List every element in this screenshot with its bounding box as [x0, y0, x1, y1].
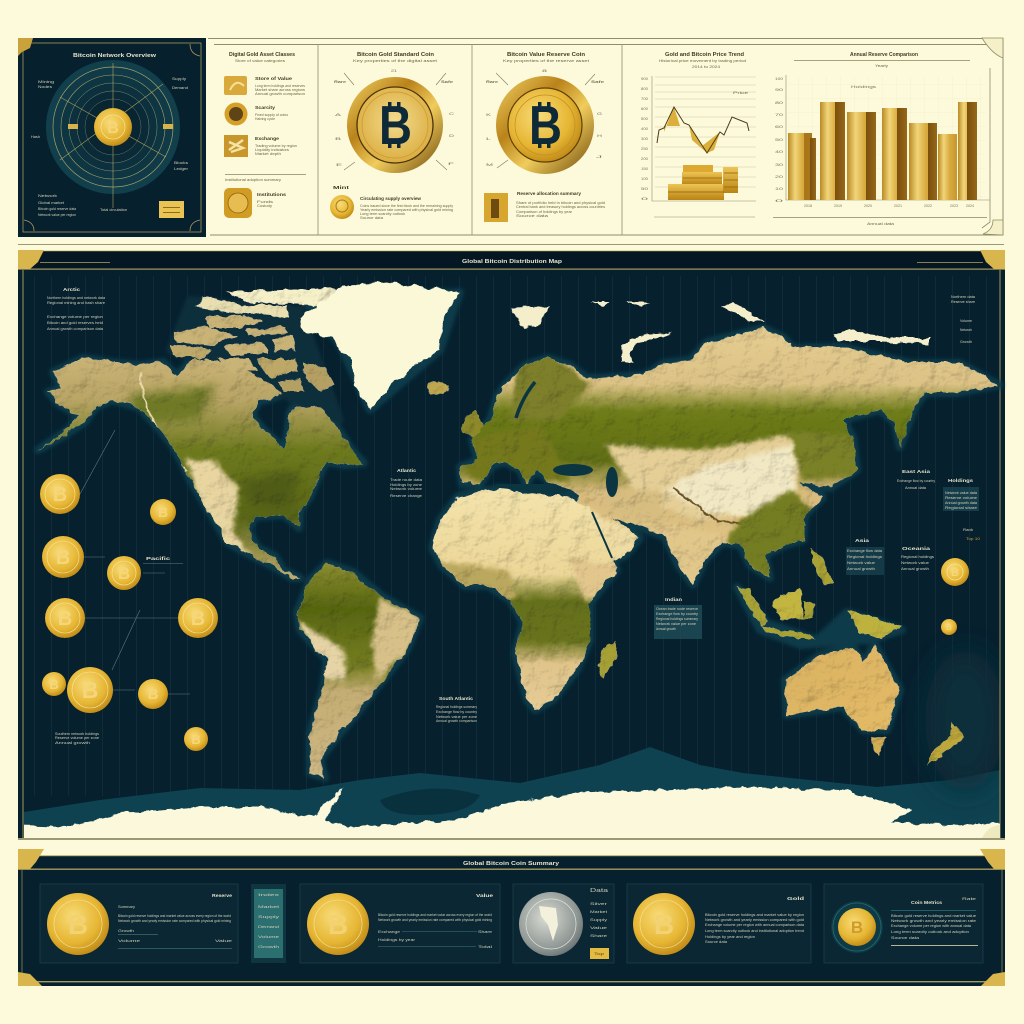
token item 4: Funds	[257, 200, 273, 204]
map annotation: north atlantic: Reserve change	[390, 494, 422, 498]
coin two heading: Bitcoin Value Reserve Coin	[507, 52, 585, 58]
map annotation: top left: Exchange volume per region	[47, 315, 103, 319]
coin two callouts: M	[486, 163, 493, 167]
map annotation: south asia group: Annual growth	[901, 567, 929, 571]
line chart grid and axis: 50	[641, 187, 648, 191]
bar chart axis: 0	[775, 199, 783, 203]
map annotation: indian ocean: Exchange flow by country	[656, 612, 698, 616]
map annotation: asia group: Annual growth data	[945, 501, 977, 505]
token item 3	[224, 135, 297, 157]
bottom card 1: B	[68, 909, 88, 940]
radar labels: Ledger	[174, 167, 189, 171]
bottom card 4 silver: Market	[590, 910, 607, 914]
line chart grid and axis: 800	[641, 87, 648, 91]
bottom card 5: Exchange volume per region with annual comparison data	[705, 923, 804, 927]
token list heading: Digital Gold Asset Classes	[229, 52, 295, 58]
map annotation: top right: Growth	[960, 340, 972, 344]
coin one caption: Source data	[360, 216, 383, 220]
bottom card 6: Coin Metrics	[911, 900, 943, 905]
map annotation: top left: Bitcoin and gold reserves held	[47, 321, 103, 325]
coin one caption: Yearly emission rate compared with physical gold mining	[360, 208, 453, 212]
bar chart axis: 20	[775, 175, 783, 179]
coin two graphic	[496, 76, 594, 174]
bottom card 6: Long term scarcity outlook and adoption	[891, 930, 969, 934]
token item 3: Liquidity indicators	[255, 148, 289, 152]
coin: map right group: B	[946, 623, 952, 632]
bar chart year labels: 2019	[834, 204, 842, 208]
map annotation: top left: Annual growth comparison data	[47, 327, 103, 331]
map annotation: south asia group: Exchange flow data	[847, 549, 882, 553]
line chart grid and axis: 250	[641, 147, 648, 151]
map annotation: top left: Arctic	[63, 287, 81, 292]
bar chart axis: 50	[775, 138, 783, 142]
coin two callouts: G	[597, 112, 602, 116]
line chart grid and axis: Price	[733, 91, 748, 95]
land: north america	[38, 358, 364, 578]
bottom strip heading: Global Bitcoin Coin Summary	[463, 861, 559, 867]
token item 4: Custody	[257, 204, 272, 208]
coin one callouts: F	[448, 162, 456, 166]
map annotation: top right: Volume	[960, 319, 972, 323]
panel: bitcoin coin one	[330, 52, 456, 220]
southern ocean band	[24, 747, 1000, 838]
map annotation: north atlantic: Network volume	[390, 487, 422, 491]
bar chart heading: Annual Reserve Comparison	[850, 52, 918, 58]
coin: map left group: B	[53, 484, 67, 506]
bar chart axis: 10	[775, 187, 783, 191]
coin one caption: Mint	[333, 185, 350, 190]
coin two caption: Reserve allocation summary	[517, 191, 582, 196]
coin one callouts: B	[335, 137, 342, 141]
bottom card 2 teal: Market	[258, 905, 279, 909]
bottom card 4 silver: Share	[590, 934, 607, 938]
bottom card 2 teal	[251, 884, 286, 963]
bar chart year labels: 2023	[950, 204, 958, 208]
radar labels: Network	[38, 194, 58, 198]
coin: map left group: B	[118, 564, 130, 583]
map annotation: south pacific: Annual growth	[55, 741, 90, 745]
divider rule	[18, 244, 1004, 245]
panel: bitcoin coin two	[484, 52, 605, 222]
map annotation: indian ocean: Annual growth	[656, 627, 676, 631]
coin two graphic: B	[529, 94, 562, 156]
token item 4: Institutional adoption summary	[225, 178, 281, 182]
bottom card 3: B	[328, 909, 348, 940]
land: canadian arctic islands	[170, 288, 340, 392]
bottom strip corners	[18, 849, 1005, 986]
line chart grid and axis: 200	[641, 157, 648, 161]
ocean shallows right	[925, 650, 1005, 790]
coin: map left group: B	[58, 608, 72, 630]
map annotation: top right: Northern data	[951, 295, 975, 299]
bottom card 1: Bitcoin gold reserve holdings and market value across every region of the world	[118, 914, 231, 918]
coin one callouts: E	[336, 163, 343, 167]
bottom card 3: Bitcoin gold reserve holdings and market value across every region of the world	[378, 913, 492, 917]
line chart grid and axis: 600	[641, 107, 648, 111]
line chart grid and axis: 300	[641, 137, 648, 141]
radar labels: Nodes	[38, 85, 53, 89]
line chart grid and axis: 150	[641, 167, 648, 171]
coin: map left group: B	[49, 677, 59, 692]
map annotation: south asia group: Regional holdings	[847, 555, 883, 559]
panel: bottom strip	[18, 849, 1005, 986]
bottom card 6: Network growth and yearly emission rate	[891, 919, 976, 923]
bottom card 5: Gold	[787, 896, 804, 901]
map annotation: asia group: Exchange flow by country	[897, 479, 935, 483]
coin: map left group	[40, 430, 218, 751]
map annotation: asia group: Annual data	[905, 486, 926, 490]
continental shelf halo	[38, 292, 999, 778]
map annotation: south asia group: Network value	[901, 561, 929, 565]
coin two callouts: K	[486, 113, 492, 117]
map annotation: south pacific	[55, 732, 99, 745]
token item 1: Market share across regions	[255, 88, 305, 92]
land: uk	[462, 410, 487, 437]
bottom card 5: B	[654, 909, 674, 940]
bar chart axis	[775, 68, 990, 228]
radar legend card	[159, 201, 184, 218]
bottom card 2 teal: Growth	[258, 945, 279, 949]
token item 3: Market depth	[255, 152, 281, 156]
token item 3: Exchange	[255, 136, 280, 141]
bar chart axis: Holdings	[851, 85, 876, 89]
panel: bitcoin coin two: Key properties of the reserve asset	[503, 59, 589, 63]
coin one caption: Circulating supply overview	[360, 196, 422, 201]
bottom card 3: Share	[478, 930, 492, 934]
radar labels: Network value per region	[38, 213, 76, 217]
bottom card 4 silver: Supply	[590, 918, 608, 922]
map annotation: asia group: Regional share	[945, 506, 977, 510]
map annotation: asia group	[897, 469, 979, 511]
bottom card 1: Value	[215, 939, 232, 943]
map annotation: north atlantic: Holdings by zone	[390, 483, 422, 487]
coin two callouts: H	[597, 134, 603, 138]
coin two callouts: L	[486, 137, 491, 141]
land: greenland	[300, 282, 460, 410]
coin two callouts: Safe	[591, 80, 604, 84]
bottom card 5: Long term scarcity outlook and institutional adoption trend	[705, 929, 804, 933]
line chart grid and axis: 400	[641, 127, 648, 131]
bar chart axis: 90	[775, 88, 783, 92]
map annotation: top right	[951, 295, 975, 344]
coin two callouts: Rare	[486, 80, 498, 84]
bottom card 1: Volume	[118, 939, 140, 943]
bottom card 3: Holdings by year	[378, 938, 416, 942]
panel: token list: Store of value categories	[235, 59, 285, 63]
map annotation: asia group: Network value data	[945, 491, 977, 495]
map annotation: top left	[47, 287, 105, 331]
land: south east asia islands	[737, 548, 902, 640]
bottom card 5: Network growth and yearly emission compared with gold	[705, 918, 804, 922]
panel: token list	[224, 52, 306, 218]
coin one callouts: Safe	[441, 80, 453, 84]
bottom card 1: Summary	[118, 905, 136, 909]
radar centre coin	[94, 108, 132, 146]
bar chart year labels: Annual data	[867, 222, 894, 226]
map corner ornaments	[18, 250, 1005, 838]
coin: map left group: B	[158, 504, 168, 520]
ocean grid	[30, 276, 996, 796]
panel: top cream frame	[208, 38, 1003, 235]
bottom card 6: Bitcoin gold reserve holdings and market value	[891, 914, 976, 918]
coin: map left group: B	[148, 686, 159, 703]
land: tasmania	[870, 736, 888, 755]
map ocean	[18, 250, 1005, 840]
continents	[38, 288, 999, 778]
bottom card 4 silver: Value	[590, 926, 607, 930]
panel: bar chart: Yearly	[875, 64, 888, 68]
bottom card 6: Rate	[962, 897, 976, 901]
token item 2: Scarcity	[255, 105, 276, 110]
map annotation: asia group: Holdings	[948, 478, 974, 483]
coin two caption: Share of portfolio held in bitcoin and physical gold	[516, 201, 605, 205]
bar chart year labels: 2024	[966, 204, 974, 208]
map annotation: north atlantic	[390, 468, 422, 498]
coin one graphic: B	[379, 94, 412, 156]
map annotation: indian ocean: Regional holdings summary	[656, 617, 698, 621]
coin one callouts: A	[335, 113, 342, 117]
bottom card 3: Network growth and yearly emission rate compared with physical gold mining	[378, 918, 492, 922]
map annotation: south asia group: Asia	[855, 538, 870, 543]
radar labels: Supply	[172, 77, 187, 81]
radar labels: Blocks	[174, 161, 189, 165]
bottom card 2 teal: Index	[258, 893, 280, 897]
bar chart axis: 100	[775, 77, 783, 81]
bar chart axis: 60	[775, 125, 783, 129]
price line	[657, 107, 749, 153]
map annotation: north atlantic: Atlantic	[397, 468, 417, 473]
bars	[788, 102, 977, 200]
map annotation: south asia group: Regional holdings	[901, 555, 935, 559]
bottom card 3: Exchange	[378, 930, 400, 934]
bottom card 5: Holdings by year and region	[705, 935, 755, 939]
coin one callouts: C	[449, 112, 455, 116]
coin one heading: Bitcoin Gold Standard Coin	[357, 52, 434, 58]
bottom card 3: Value	[476, 893, 494, 898]
map annotation: south asia group: Annual growth	[847, 567, 875, 571]
gold ingots	[668, 165, 738, 200]
map annotation: south asia group: Oceania	[902, 546, 931, 551]
map annotation: south atlantic: Annual growth comparison	[436, 719, 477, 723]
coin one callouts	[334, 69, 456, 170]
map annotation: south atlantic: Regional holdings summary	[436, 705, 477, 709]
coin two caption	[484, 191, 605, 222]
bar chart year labels: 2020	[864, 204, 872, 208]
map annotation: top left: Regional mining and hash share	[47, 301, 105, 305]
token item 4	[224, 174, 306, 218]
bar chart axis: 30	[775, 163, 783, 167]
land: iceland	[426, 382, 448, 394]
bar chart year labels: 2018	[804, 204, 812, 208]
bottom card 1	[40, 884, 238, 963]
land: antarctica	[10, 787, 1010, 860]
bottom card 4 silver: Silver	[590, 902, 609, 906]
map annotation: south asia group	[846, 528, 980, 575]
line chart grid and axis: 900	[641, 77, 648, 81]
bottom card 5: Bitcoin gold reserve holdings and market value by region	[705, 913, 804, 917]
bottom card 3: Total	[478, 945, 493, 949]
line chart grid and axis	[641, 76, 756, 217]
coin: map left group: B	[82, 677, 98, 703]
coin two callouts: J	[596, 155, 603, 159]
panel: line chart: 2014 to 2024	[692, 65, 720, 69]
bar chart axis: 70	[775, 113, 783, 117]
radar labels	[31, 77, 189, 217]
land: madagascar	[598, 640, 618, 680]
land: polar ice	[10, 282, 1010, 860]
coin: map left group: B	[191, 608, 205, 630]
coin one graphic	[347, 77, 443, 173]
bottom card 6: B	[851, 918, 863, 937]
bottom card 1: Network growth and yearly emission rate compared with physical gold mining	[118, 919, 231, 923]
bottom card 2 teal: Supply	[258, 915, 280, 919]
radar chart	[46, 60, 180, 208]
bottom card 6: Source data	[891, 936, 919, 940]
coin one callouts: 21	[391, 69, 397, 73]
map annotation: south atlantic: Network value per zone	[436, 715, 477, 719]
line chart heading: Gold and Bitcoin Price Trend	[665, 52, 744, 58]
panel: line chart	[641, 52, 756, 217]
coin: map left group: B	[56, 547, 70, 569]
map annotation: asia group: East Asia	[902, 469, 931, 474]
map annotation: north atlantic: Trade route data	[390, 478, 422, 482]
map bottom rule	[18, 838, 1005, 840]
radar labels: Bitcoin gold reserve data	[38, 207, 76, 211]
line chart grid and axis: 500	[641, 117, 648, 121]
land: africa	[432, 488, 620, 710]
panel: bitcoin coin one: Key properties of the digital asset	[353, 59, 437, 63]
bottom card 3	[300, 884, 500, 963]
radar labels: Mining	[38, 80, 54, 84]
token item 2	[224, 102, 288, 126]
map frame	[23, 270, 1000, 838]
bar chart year labels: 2022	[924, 204, 932, 208]
radar centre coin: B	[107, 120, 119, 137]
radar labels: Total circulation	[100, 208, 127, 212]
coin two caption: Source data	[516, 214, 548, 218]
bar chart year labels	[773, 204, 987, 226]
land: new zealand	[928, 722, 965, 765]
radar heading: Bitcoin Network Overview	[73, 53, 156, 59]
map annotation: south asia group: Rank	[963, 528, 974, 532]
coin one callouts: D	[449, 134, 455, 138]
token item 1: Long term holdings and reserves	[255, 84, 305, 88]
land: south america	[297, 563, 425, 778]
map annotation: south pacific: Southern network holdings	[55, 732, 99, 736]
bottom card 1: Reserve	[212, 893, 233, 898]
panel: dark radar panel	[18, 38, 206, 237]
map annotation: south atlantic	[436, 696, 477, 723]
bar chart axis: 40	[775, 150, 783, 154]
bar chart grid	[788, 76, 986, 200]
radar labels: Global market	[38, 201, 64, 205]
bottom card 5	[627, 884, 811, 963]
coin one callouts: Rare	[334, 80, 346, 84]
bottom card 2 teal: Demand	[258, 925, 279, 929]
token item 2: Fixed supply of coins	[255, 113, 288, 117]
inland seas	[495, 382, 618, 558]
bar chart year labels: 2021	[894, 204, 902, 208]
panel: line chart: Historical price movement by trading period	[659, 59, 746, 63]
land: eurasia	[460, 328, 999, 585]
map annotation: top right: Reserve share	[951, 300, 975, 304]
bottom card 4 silver: Data	[590, 888, 608, 894]
map annotation: top left: Northern holdings and network data	[47, 296, 105, 300]
map annotation: pacific label: Pacific	[146, 556, 171, 561]
panel: world map	[10, 250, 1010, 860]
map annotation: pacific label	[143, 556, 183, 564]
coin: map left group: B	[191, 732, 201, 747]
bottom card 2 teal: Volume	[258, 935, 279, 939]
bottom card 1: Growth	[118, 929, 134, 933]
line chart grid and axis: 0	[641, 197, 648, 201]
token item 1: Store of Value	[255, 76, 293, 81]
radar labels: Hash	[31, 135, 40, 139]
coin two caption: Central bank and treasury holdings across countries	[516, 205, 605, 209]
coin one caption: Coins issued since the first block and the remaining supply	[360, 204, 453, 208]
token item 1: Annual growth comparison	[255, 92, 305, 96]
map annotation: indian ocean: Network value per zone	[656, 622, 696, 626]
token item 1	[224, 76, 305, 96]
coin: map right group: B	[951, 567, 959, 579]
map annotation: south asia group: Top 10	[966, 537, 980, 541]
bottom card 6: Exchange volume per region with annual data	[891, 924, 971, 928]
coin two callouts	[486, 69, 604, 168]
land: australia	[785, 645, 900, 730]
coin two callouts: 8	[542, 69, 547, 73]
bottom card 4 silver: Top	[594, 952, 604, 956]
map annotation: top right: Network	[960, 328, 972, 332]
map header strip: Global Bitcoin Distribution Map	[462, 259, 562, 265]
bar chart axis: 80	[775, 101, 783, 105]
line chart grid and axis: 100	[641, 177, 648, 181]
coin two caption: Comparison of holdings by year	[516, 210, 573, 214]
bottom card 6	[824, 884, 983, 963]
line chart grid and axis: 700	[641, 97, 648, 101]
map annotation: south pacific: Reserve volume per zone	[55, 736, 99, 740]
radar labels: Demand	[172, 86, 188, 90]
map header strip	[18, 250, 1005, 270]
land: arctic islands	[510, 302, 930, 362]
map annotation: asia group: Reserve volume	[945, 496, 977, 500]
map annotation: south atlantic: South Atlantic	[439, 696, 474, 701]
panel: bar chart	[773, 52, 990, 228]
coin: map right group	[941, 558, 969, 635]
map annotation: indian ocean: Indian	[665, 597, 682, 602]
map annotation: south asia group: Network value	[847, 561, 875, 565]
bottom card 5: Source data	[705, 940, 727, 944]
token item 4: Institutions	[257, 192, 287, 197]
map annotation: indian ocean: Ocean trade route reserve	[656, 607, 698, 611]
token item 3: Trading volume by region	[255, 144, 297, 148]
token item 2: Halving cycle	[255, 117, 275, 121]
bottom card 4 silver	[513, 884, 614, 963]
coin one caption	[330, 185, 453, 220]
coin one caption: Long term scarcity outlook	[360, 212, 405, 216]
map annotation: south atlantic: Exchange flow by country	[436, 710, 477, 714]
map annotation: indian ocean	[654, 597, 702, 639]
